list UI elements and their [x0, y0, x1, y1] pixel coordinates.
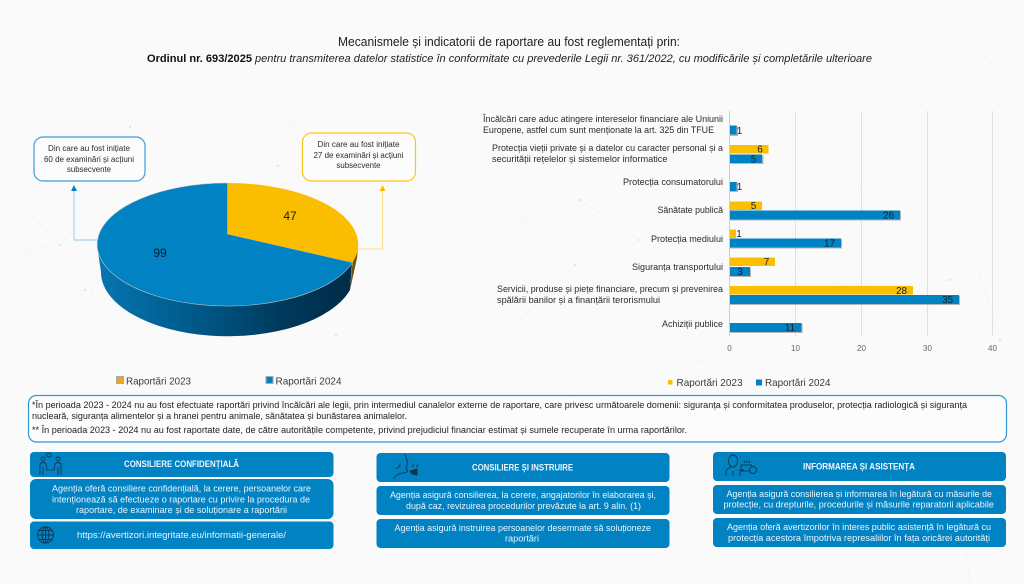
bar chart: 7 — [764, 257, 770, 268]
text: training description — [376, 519, 670, 548]
text: counselling description — [30, 479, 334, 519]
text: counselling description: Agenția asigură consilierea, la cerere, angajatorilor în elaborarea și, — [390, 490, 656, 501]
heading: counselling and training — [376, 453, 670, 482]
pie slice: 2023 — [228, 183, 358, 262]
callout: 2024 examinations: subsecvente — [67, 165, 112, 174]
pie side wall — [97, 245, 352, 336]
icon: person with whistle — [726, 455, 756, 476]
heading: confidential counselling — [30, 452, 334, 477]
bar chart: 10 — [791, 344, 800, 353]
title — [147, 35, 872, 65]
bar chart: 1 — [737, 182, 743, 193]
heading: counselling and training: CONSILIERE ȘI INSTRUIRE — [472, 462, 573, 472]
pie value 99: 99 — [153, 246, 167, 260]
bar chart legend: Raportări 2024 — [765, 377, 831, 389]
notes panel: nucleară, siguranța alimentelor și a hranei pentru animale, sănătatea și bunăstarea animalelor. — [32, 411, 407, 421]
callout: 2024 examinations: Din care au fost inițiate — [48, 144, 131, 153]
text: counselling description: Agenția oferă consiliere confidențială, la cerere, persoanelor care — [52, 484, 311, 494]
bar chart: 17 — [824, 238, 835, 250]
pie slice: 2024 — [97, 183, 352, 306]
bar chart: 40 — [988, 344, 997, 353]
bar chart: Achiziții publice — [662, 319, 723, 330]
bar chart: Europene, astfel cum sunt menționate la art. 325 din TFUE — [483, 125, 714, 136]
bar chart: Protecția vieții private și a datelor cu caracter personal și a — [492, 143, 724, 154]
text: website link — [30, 522, 334, 549]
icon: two people talking — [40, 453, 61, 475]
panel: counselling and training — [376, 453, 670, 548]
bar chart: Protecția consumatorului — [623, 177, 723, 188]
text: assistance description — [713, 518, 1006, 547]
bar chart: Încălcări care aduc atingere intereselor financiare ale Uniunii — [482, 114, 723, 125]
bar chart: 0 — [727, 344, 732, 353]
bar chart: 26 — [883, 210, 894, 222]
bar chart: 5 — [751, 154, 757, 166]
arrow: pie to blue callout — [71, 185, 97, 240]
pie chart: reports 2023 vs 2024 — [97, 183, 358, 336]
bar chart: spălării banilor și a finanțării terorismului — [497, 295, 660, 306]
text: assistance description: Agenția oferă avertizorilor în interes public asistență în legătură cu — [727, 522, 991, 533]
text: website link: https://avertizori.integritate.eu/informatii-generale/ — [77, 530, 286, 541]
bar chart: 3 — [737, 267, 743, 278]
bar chart legend — [668, 377, 831, 389]
bar chart: 1 — [736, 229, 742, 240]
bar chart: 35 — [942, 295, 953, 306]
bar chart: Sănătate publică — [658, 205, 724, 216]
text: information description: Agenția asigură consilierea și informarea în legătură cu măsurile de — [726, 489, 992, 500]
heading: confidential counselling: CONSILIERE CONFIDENȚIALĂ — [124, 459, 239, 469]
callout: 2024 examinations — [34, 137, 145, 181]
text: training description: raportări — [505, 534, 539, 544]
pie legend — [116, 376, 342, 388]
heading: information and assistance — [713, 452, 1006, 481]
notes panel — [28, 396, 1006, 442]
callout: 2023 examinations — [302, 133, 416, 181]
bar chart: Siguranța transportului — [632, 262, 723, 273]
text: counselling description: raportare, de examinare și de soluționare a raportării — [76, 505, 287, 516]
bar chart: Servicii, produse și piețe financiare, precum și prevenirea — [497, 284, 724, 295]
bar chart: 6 — [757, 144, 763, 156]
notes panel: *În perioada 2023 - 2024 nu au fost efectuate raportări privind încălcări ale legii, prin intermediul canalelor externe de raportare, care privesc următoarele domenii: siguranța și conformitatea produselor, protecția radiologică și siguranța — [32, 400, 967, 410]
text: information description: protecție, cu drepturile, procedurile și măsurile reparatorii aplicabile — [724, 500, 994, 510]
bar chart: 5 — [751, 201, 757, 212]
callout: 2023 examinations: 27 de examinări și acțiuni — [314, 151, 404, 160]
pie yellow side wall — [350, 246, 358, 290]
heading: information and assistance: INFORMAREA ȘI ASISTENȚA — [803, 462, 915, 472]
pie legend: Raportări 2024 — [276, 376, 342, 388]
callout: 2023 examinations: Din care au fost inițiate — [318, 140, 400, 149]
text: counselling description: după caz, revizuirea procedurilor prevăzute la art. 9 alin. (1) — [406, 501, 641, 512]
pie legend: Raportări 2023 — [126, 376, 191, 388]
bar chart — [482, 111, 997, 353]
bar chart: 30 — [923, 344, 932, 353]
icon: person with megaphone — [393, 455, 418, 479]
bar chart: 1 — [737, 126, 743, 137]
panel: information and assistance — [713, 452, 1006, 547]
pie value 47: 47 — [283, 209, 297, 223]
bar chart: 20 — [857, 344, 866, 353]
bar chart: 11 — [785, 323, 796, 334]
title: pentru transmiterea datelor statistice în conformitate cu prevederile Legii nr. 361/2022, cu modificările și completările ulterioare — [254, 53, 872, 65]
bar chart: 28 — [896, 286, 907, 297]
bar chart: Protecția mediului — [651, 234, 723, 245]
panel: confidential counselling — [30, 452, 334, 549]
text: training description: Agenția asigură instruirea persoanelor desemnate să soluționeze — [394, 523, 651, 534]
icon: globe — [38, 527, 54, 543]
callout: 2023 examinations: subsecvente — [336, 161, 381, 170]
title: Ordinul nr. 693/2025 — [147, 53, 252, 65]
text: counselling description: intenționează să efectueze o raportare cu privire la procedura de — [52, 494, 310, 506]
text: information description — [713, 485, 1006, 514]
bar chart: securității rețelelor și sistemelor informatice — [492, 154, 668, 165]
arrow: pie to yellow callout — [358, 185, 386, 249]
text: assistance description: protecția acestora împotriva represaliilor în fața oricărei autorități — [728, 533, 990, 544]
text: counselling description — [376, 486, 670, 515]
notes panel: ** În perioada 2023 - 2024 nu au fost raportate date, de către autoritățile competente, privind prejudiciul financiar estimat și sumele recuperate în urma raportărilor. — [32, 425, 687, 435]
title: Mecanismele și indicatorii de raportare au fost reglementați prin: — [338, 35, 680, 49]
bar chart legend: Raportări 2023 — [676, 377, 743, 389]
callout: 2024 examinations: 60 de examinări și acțiuni — [44, 155, 134, 164]
